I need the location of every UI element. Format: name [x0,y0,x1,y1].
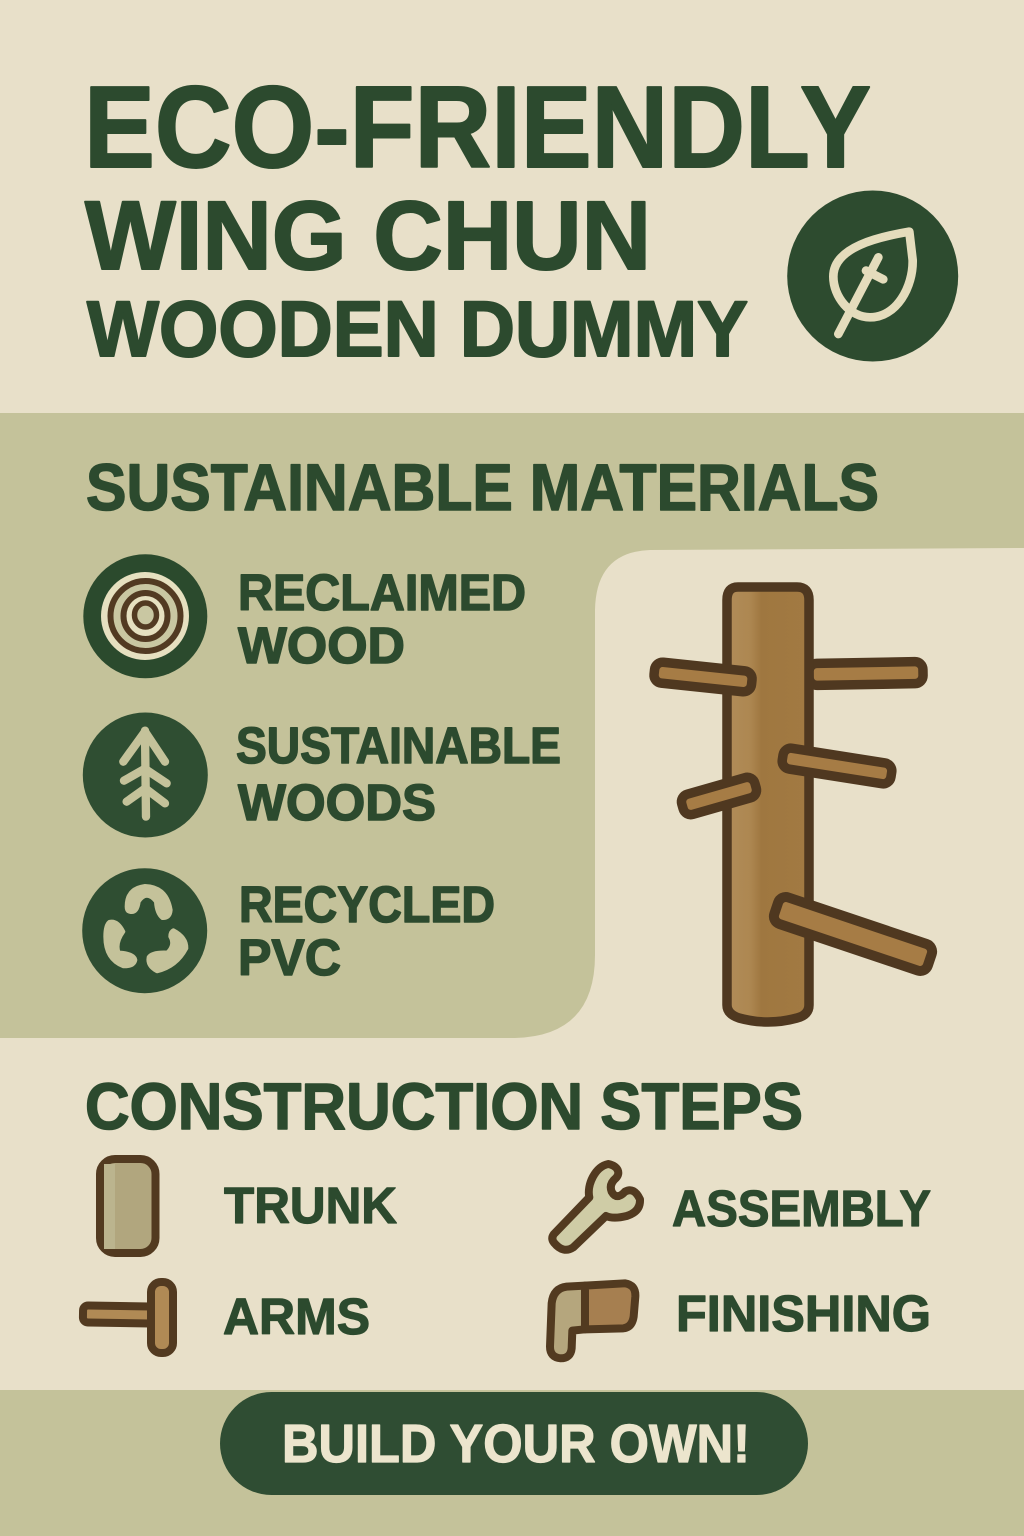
button: build your own [220,1392,808,1495]
material: reclaimed wood [83,554,526,678]
illustration: wooden dummy [653,587,934,1022]
label: trunk: TRUNK [224,1177,397,1234]
icon: trunk block [100,1159,156,1253]
title: WOODEN DUMMY [87,284,748,373]
heading: construction steps: CONSTRUCTION STEPS [85,1069,803,1143]
arm: lower right [772,895,934,973]
icon: recycling [82,868,207,993]
label: assembly: ASSEMBLY [672,1180,931,1237]
label: finishing: FINISHING [676,1285,931,1342]
label: reclaimed wood: RECLAIMED [238,564,526,621]
material: recycled pvc [82,868,495,993]
label: reclaimed wood: WOOD [238,617,405,674]
title: WING CHUN [85,181,651,290]
title: ECO-FRIENDLY [84,62,871,192]
arm: upper left [653,661,753,693]
label: reclaimed wood [238,564,526,674]
label: recycled pvc: PVC [238,929,341,986]
icon: pine tree [83,712,208,838]
label: recycled pvc [238,876,495,986]
icon: wrench [552,1164,640,1250]
icon: tree rings [83,554,207,678]
arm: upper right [809,662,923,685]
icon: finishing corner block [550,1283,635,1358]
footer band [0,1390,1024,1536]
step: trunk [100,1159,397,1253]
button: build your own: BUILD YOUR OWN! [282,1414,750,1474]
label: recycled pvc: RECYCLED [239,876,495,933]
heading: sustainable materials: SUSTAINABLE MATERIALS [86,450,879,524]
arm: middle right [781,747,893,785]
panel: sustainable materials background [0,413,1024,1038]
trunk [727,587,809,1022]
label: arms: ARMS [223,1288,370,1345]
step: arms [83,1282,370,1353]
arm: middle left [680,775,758,817]
icon: arm piece [83,1282,173,1353]
material: sustainable woods [83,712,561,838]
label: sustainable woods [236,717,561,831]
icon: leaf badge [787,190,958,362]
label: sustainable woods: WOODS [238,774,436,831]
step: assembly [552,1164,931,1250]
step: finishing [550,1283,931,1358]
title [84,62,871,373]
label: sustainable woods: SUSTAINABLE [236,717,561,774]
